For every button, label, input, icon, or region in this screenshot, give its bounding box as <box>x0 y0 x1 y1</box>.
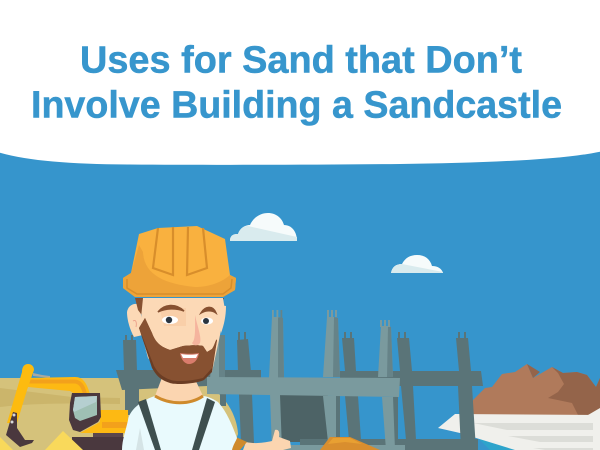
title: Uses for Sand that Don’t <box>80 40 522 82</box>
shirt <box>122 396 237 450</box>
sand ground <box>0 378 238 450</box>
hair sides <box>135 298 146 318</box>
title: Involve Building a Sandcastle <box>31 84 562 126</box>
beard <box>139 318 217 384</box>
excavator body <box>80 410 128 433</box>
sky background <box>0 140 600 450</box>
excavator cab <box>69 393 101 432</box>
excavator boom <box>25 377 90 394</box>
ear <box>127 304 143 337</box>
right ear <box>218 305 226 333</box>
right eye <box>201 318 213 324</box>
left eye <box>162 316 178 324</box>
neck <box>155 375 203 403</box>
sleeve cuff <box>228 437 247 450</box>
shirt collar <box>155 396 203 403</box>
title <box>31 40 562 126</box>
excavator piston <box>33 373 50 378</box>
suspenders <box>138 399 161 450</box>
paper sheet <box>438 408 600 450</box>
teal water sliver <box>470 430 560 450</box>
icon: small cloud <box>391 255 443 273</box>
concrete structure: light columns and beams <box>207 310 405 450</box>
nose <box>192 315 200 345</box>
excavator <box>6 364 128 450</box>
eyebrows <box>158 305 184 312</box>
hard hat <box>123 226 236 297</box>
white title banner <box>0 0 600 165</box>
concrete structure: front dark frame <box>300 332 483 450</box>
rock pile <box>473 364 600 420</box>
mouth <box>180 353 199 364</box>
icon: large cloud <box>230 213 297 241</box>
orange sand heap <box>320 437 380 450</box>
sand piles <box>0 431 83 450</box>
excavator bucket <box>6 412 34 447</box>
excavator tracks <box>93 433 123 438</box>
excavator arm <box>7 364 34 423</box>
arm and hand <box>243 430 291 450</box>
concrete structure: back columns and beams <box>116 332 400 443</box>
eye shading <box>160 308 186 326</box>
worker <box>122 226 291 450</box>
face <box>140 298 225 382</box>
